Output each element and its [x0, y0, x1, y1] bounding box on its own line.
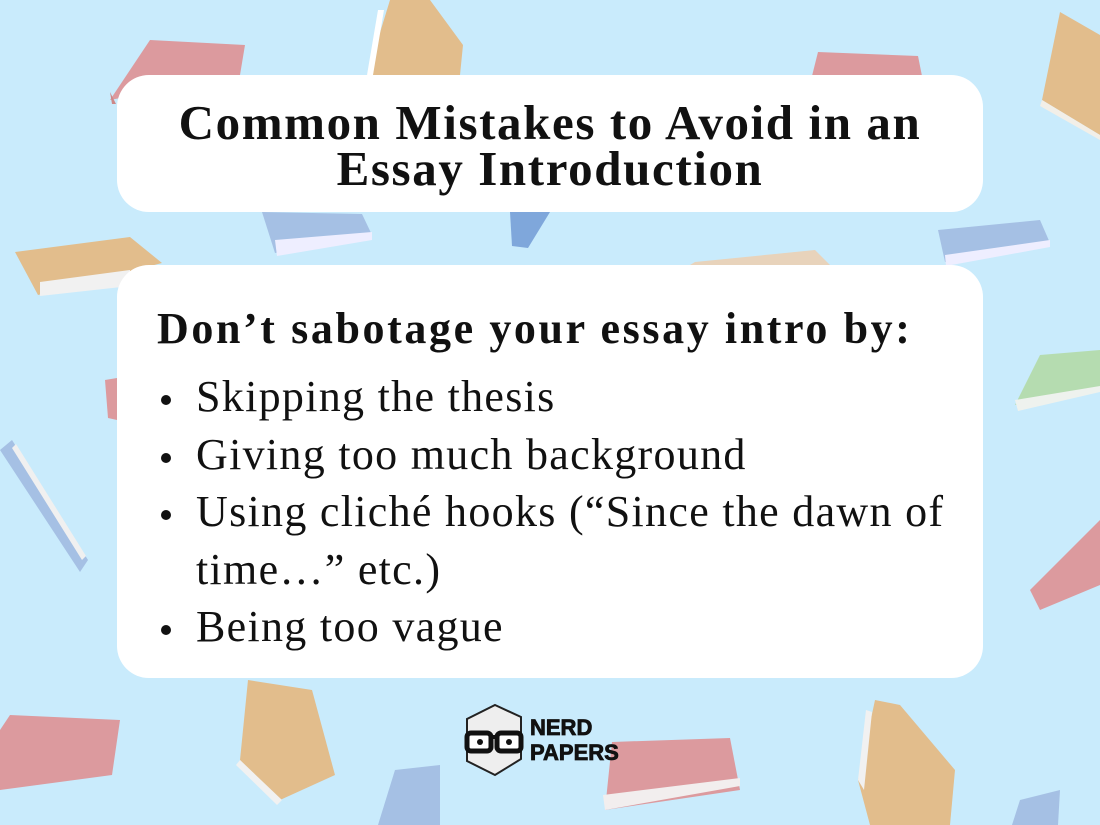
bullet list: Giving too much background	[196, 430, 747, 478]
title panel	[117, 75, 983, 212]
icon: nerd hexagon	[467, 705, 521, 775]
bullet list: Being too vague	[196, 602, 504, 651]
title panel: Essay Introduction	[337, 141, 763, 196]
logo: Nerd Papers	[464, 704, 619, 776]
bullet list: Skipping the thesis	[196, 372, 556, 421]
title panel: Common Mistakes to Avoid in an	[179, 95, 921, 150]
bullet list: Using cliché hooks (“Since the dawn of	[196, 487, 944, 536]
heading: Don’t sabotage your essay intro by:	[157, 304, 913, 353]
logo text	[530, 715, 619, 765]
bullet list	[161, 372, 944, 651]
logo text: NERD	[530, 715, 592, 740]
logo text: PAPERS	[530, 740, 619, 765]
bullet list: time…” etc.)	[196, 544, 441, 594]
panel: mistakes list	[117, 265, 983, 678]
